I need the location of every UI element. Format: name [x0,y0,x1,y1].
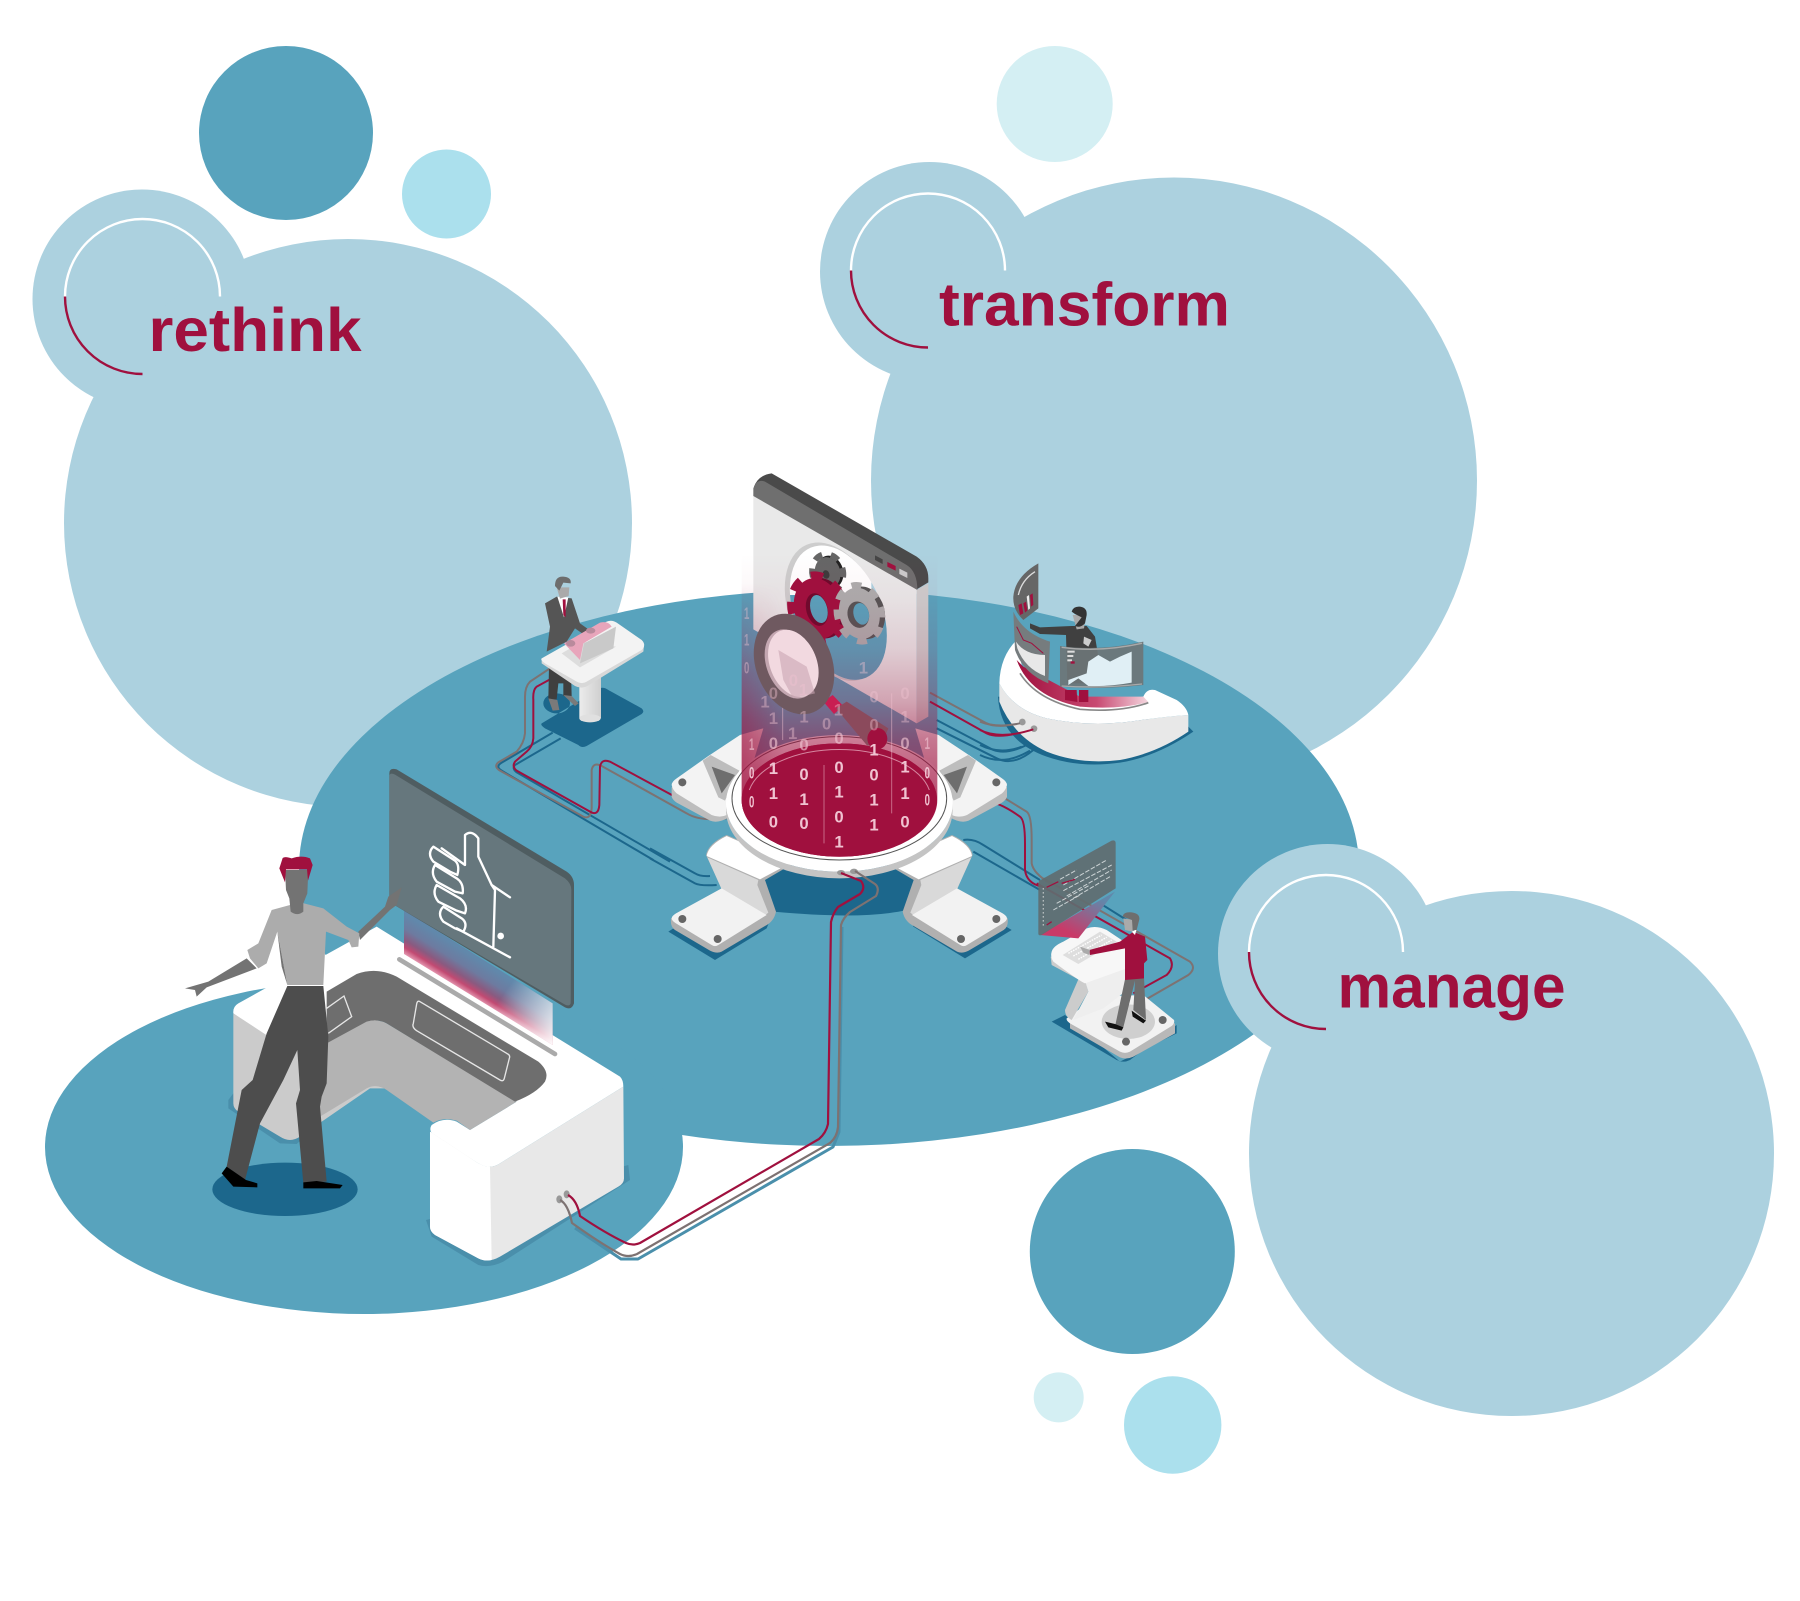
binary digits: 0 [822,715,831,734]
wires: left desk to centre [560,871,878,1259]
binary digits: 1 [834,832,844,851]
heading: transform with arc: transform [939,270,1230,338]
recess inset outlines [327,996,510,1081]
platform: main ellipse [299,590,1359,1146]
grey gear [830,579,891,647]
desk recess [327,971,546,1102]
binary digits: 0 [744,658,749,677]
binary digits: 1 [869,741,879,760]
binary digits: 0 [925,791,930,810]
floor shadow under centre station [668,863,1012,960]
binary digits: 0 [925,763,930,782]
decorative circle dark lower [1030,1149,1235,1354]
binary digits: 1 [799,681,808,700]
binary digits: 1 [744,604,749,623]
heading: manage with arc [1249,875,1566,1029]
bubble: rethink [32,190,632,807]
terminal screen [1038,840,1116,935]
binary digits: 1 [769,759,778,778]
binary digits: 1 [769,709,778,728]
desk inner wall [317,1020,517,1130]
workstation top [1051,927,1127,983]
podium with businessman [541,577,644,747]
binary digits: 0 [869,687,879,706]
workstation column [1051,957,1132,1020]
front left leg [671,835,793,953]
binary digits: 0 [799,814,809,833]
binary digits: 0 [769,734,778,753]
bubble: transform [820,162,1477,784]
podium column [579,673,601,722]
binary digits [744,604,930,851]
projector bar [399,959,555,1054]
heading: rethink with arc: rethink [148,296,362,364]
binary digits: 0 [834,729,844,748]
binary digits: 0 [769,812,778,831]
desk left face [233,1013,387,1140]
binary digits: 1 [869,791,879,810]
data cylinder glow [742,586,938,857]
binary digits: 1 [925,734,930,753]
decorative circle light [402,150,491,238]
platform: lower left ellipse [45,980,683,1314]
base plate [1067,995,1175,1059]
keyboard [1063,932,1117,964]
binary digits: 0 [869,766,879,785]
window panel [753,473,928,723]
binary digits: 0 [869,716,879,735]
analyst [1030,607,1098,702]
binary digits: 0 [900,812,910,831]
back left foot [672,728,763,822]
binary digits: 0 [769,684,778,703]
front right leg [885,835,1008,953]
back right foot [915,728,1007,822]
binary digits: 0 [749,792,754,811]
heading: manage with arc: manage [1338,952,1566,1020]
binary digits: 1 [834,701,843,720]
binary digits: 0 [799,765,809,784]
decorative circle pale lower [1034,1372,1084,1422]
magnifying glass [739,602,888,749]
person presenting [185,857,402,1188]
left desk with person [185,769,630,1266]
binary digits: 1 [900,757,910,776]
centre station [668,473,1012,960]
binary digits: 1 [749,735,754,754]
binary digits: 1 [859,658,868,677]
floor shadow of person [212,1163,358,1216]
cylinder base disc [742,743,937,857]
binary digits: 0 [900,734,910,753]
podium floor shadow [541,688,643,747]
thumbs up screen [389,769,574,1008]
bubble: manage [1218,844,1774,1416]
wires: centre to terminal and dial [650,693,1050,890]
maroon gear [784,569,854,647]
binary digits: 1 [900,784,910,803]
decorative circle light lower [1124,1376,1221,1474]
dial console with analyst [980,563,1193,765]
binary digits: 0 [834,807,844,826]
binary digits: 1 [760,692,770,711]
ring thin line [732,737,947,860]
right curved screen [1060,642,1143,688]
desk shadow [228,1093,630,1266]
socket wires [980,722,1033,760]
binary digits: 1 [869,816,879,835]
binary digits: 1 [834,782,844,801]
binary digits: 0 [749,763,754,782]
binary digits: 0 [799,736,809,755]
businessman [545,577,589,711]
operator [1080,912,1147,1031]
binary digits: 1 [769,784,778,803]
binary digits: 1 [799,707,809,726]
glow crescent [1017,660,1148,708]
light beam [404,910,553,1045]
binary digits: 1 [900,707,910,726]
console front [999,683,1188,761]
lower left curved screen [1013,612,1050,683]
desk sockets [556,1190,570,1203]
wires: podium to centre [496,668,727,862]
terminal wires [1037,878,1193,1000]
console shadow [998,697,1193,765]
ring top [726,735,953,872]
gears [784,551,891,647]
ring rim [726,803,953,878]
binary digits: 0 [834,758,844,777]
terminal workstation with operator [1037,840,1193,1062]
console sockets [1019,719,1037,732]
binary digits: 1 [744,631,749,650]
desk top surface [233,927,623,1167]
upper left curved screen [1013,563,1038,620]
dark gear [808,551,848,595]
laptop and hologram [562,622,616,667]
binary digits: 1 [799,790,809,809]
window hole with background [784,542,887,681]
desk front right face [430,1087,624,1260]
console top [999,640,1188,724]
binary digits: 1 [788,724,797,743]
sockets on ring [837,869,858,875]
heading: rethink with arc [65,219,362,374]
thumbs up icon [430,833,510,957]
decorative circle dark [199,46,373,220]
decorative circle pale [997,46,1113,162]
binary digits: 0 [789,671,798,690]
terminal beam [1040,892,1115,938]
heading: transform with arc [851,193,1230,348]
binary digits: 0 [900,684,910,703]
podium top [541,621,644,688]
workstation shadow [1052,1015,1177,1062]
